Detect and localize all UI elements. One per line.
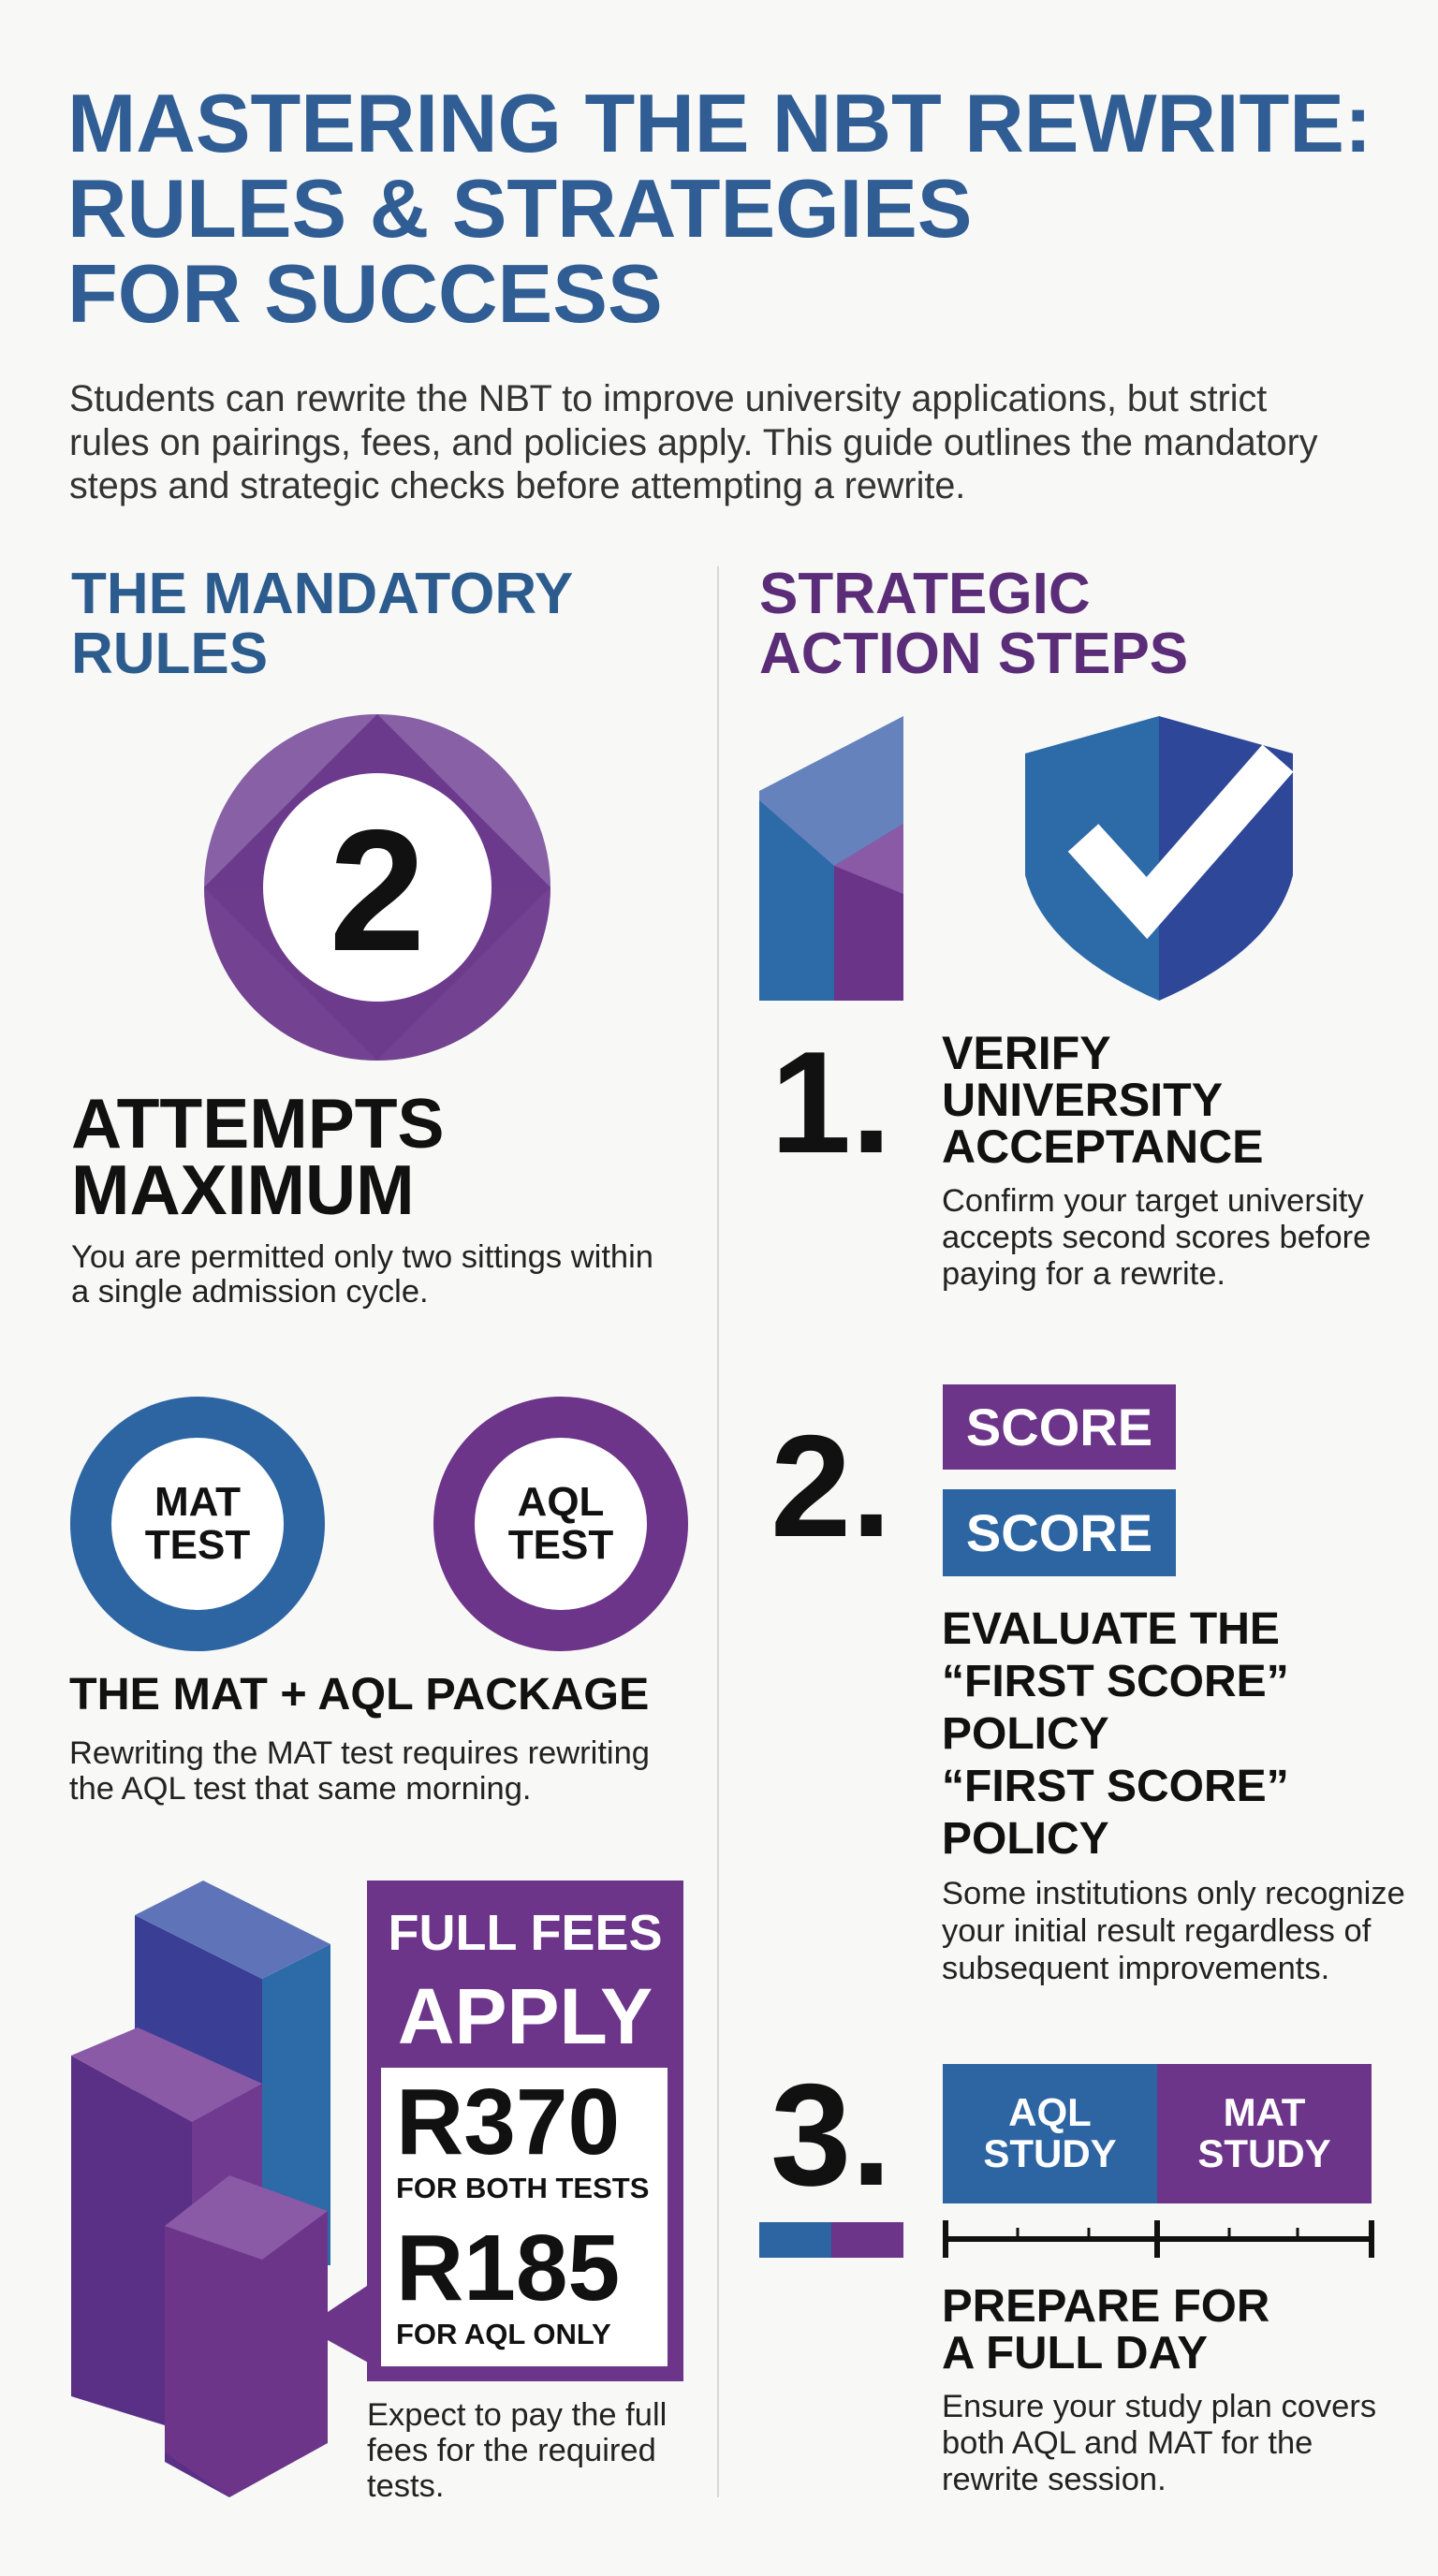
study bar: AQL [1008,2090,1092,2134]
icon: AQL test ring: TEST [508,1522,613,1568]
prices [381,2068,668,2366]
heading: strategic action steps [759,562,1188,686]
study bar [943,2064,1372,2203]
text: MAT + AQL package: THE MAT + AQL PACKAGE [69,1669,649,1720]
fees box [367,1881,683,2381]
text: fees body [367,2397,667,2504]
step 1 body: Confirm your target university [942,1183,1364,1219]
icon: score boxes: SCORE [966,1398,1152,1456]
icon: shield check [1025,716,1293,1001]
fees box: APPLY [398,1972,653,2060]
icon: AQL test ring: AQL [518,1479,604,1525]
step 2 title: POLICY [942,1709,1109,1759]
step 3 body: rewrite session. [942,2462,1167,2497]
heading: mandatory rules [71,562,573,686]
intro text: steps and strategic checks before attempting a rewrite. [69,465,965,506]
title: MASTERING THE NBT REWRITE: [67,77,1372,169]
step 2 body: Some institutions only recognize [942,1876,1405,1911]
intro text: Students can rewrite the NBT to improve university applications, but strict [69,378,1267,419]
text: fees body: tests. [367,2468,444,2504]
step 2 title [942,1604,1289,1864]
timeline [943,2220,1374,2258]
step 1 title [942,1027,1264,1173]
text: fees body: fees for the required [367,2433,656,2468]
text: attempts maximum: ATTEMPTS [71,1084,445,1163]
study bar: STUDY [983,2131,1117,2175]
study bar: MAT [1224,2090,1305,2134]
intro text: rules on pairings, fees, and policies apply. This guide outlines the mandatory [69,421,1318,462]
step 3 body [942,2389,1376,2497]
title: FOR SUCCESS [67,247,663,340]
step 3 body: both AQL and MAT for the [942,2425,1313,2461]
icon: ring with number 2 [204,714,550,1061]
prices: FOR BOTH TESTS [396,2172,649,2204]
fees heading: FULL FEES [388,1905,663,1961]
step 2 title: POLICY [942,1814,1109,1864]
icon: MAT test ring [70,1397,325,1651]
step 2 title: “FIRST SCORE” [942,1657,1289,1706]
icon: AQL test ring [433,1397,688,1651]
title [67,77,1372,340]
step 1 title: ACCEPTANCE [942,1120,1264,1173]
heading: mandatory rules: THE MANDATORY [71,562,573,626]
text: attempts maximum [71,1084,445,1229]
prices: R185 [396,2216,620,2320]
step 1 title: UNIVERSITY [942,1074,1223,1126]
icon: ring with number 2: 2 [330,795,425,988]
text: attempts body [71,1239,653,1310]
heading: mandatory rules: RULES [71,622,268,686]
title: RULES & STRATEGIES [67,162,972,255]
prices: R370 [396,2070,620,2174]
icon: MAT test ring: TEST [145,1522,250,1568]
icon: score boxes [943,1384,1176,1576]
icon: bookmark blocks [759,716,903,1001]
heading: strategic action steps: STRATEGIC [759,562,1091,626]
text: package body [69,1735,650,1807]
step 1 body: accepts second scores before [942,1220,1371,1255]
step 1 title: VERIFY [942,1027,1111,1079]
step 1 body: paying for a rewrite. [942,1256,1225,1292]
intro text [69,378,1318,506]
step 3 body: Ensure your study plan covers [942,2389,1376,2424]
step 2 body [942,1876,1405,1986]
icon: score boxes: SCORE [966,1503,1152,1562]
step 2 title: “FIRST SCORE” [942,1762,1289,1811]
step 1 number: 1. [770,1021,891,1183]
icon: isometric bars [71,1881,367,2497]
step 3 title: A FULL DAY [942,2328,1208,2378]
step 2 title: EVALUATE THE [942,1604,1280,1654]
text: attempts body: a single admission cycle. [71,1274,429,1310]
prices: FOR AQL ONLY [396,2318,611,2350]
heading: strategic action steps: ACTION STEPS [759,622,1188,686]
icon: MAT test ring: MAT [154,1479,241,1525]
step 2 body: your initial result regardless of [942,1913,1371,1949]
text: attempts body: You are permitted only two sittings within [71,1239,653,1275]
step 1 body [942,1183,1371,1292]
text: package body: Rewriting the MAT test requires rewriting [69,1735,650,1771]
text: attempts maximum: MAXIMUM [71,1150,415,1229]
text: package body: the AQL test that same morning. [69,1771,531,1807]
step 2 body: subsequent improvements. [942,1951,1329,1986]
step 3 title: PREPARE FOR [942,2281,1269,2332]
study bar: STUDY [1197,2131,1331,2175]
step 2 number: 2. [770,1405,891,1567]
step 3 title [942,2281,1269,2378]
text: fees body: Expect to pay the full [367,2397,667,2433]
icon: small split bar [759,2222,903,2258]
step 3 number: 3. [770,2054,891,2216]
